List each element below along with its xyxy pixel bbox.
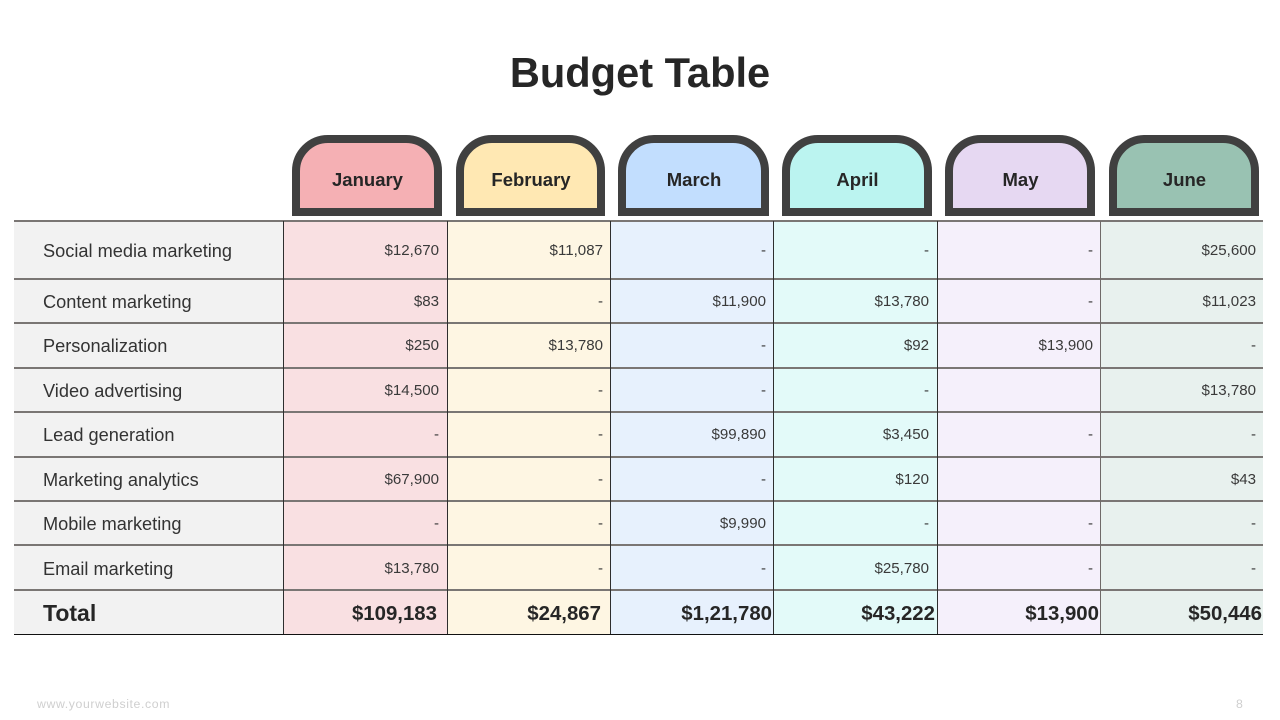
row: Total bbox=[43, 600, 1262, 626]
header tab: January bbox=[292, 135, 442, 216]
footer: page number: 8 bbox=[1236, 697, 1243, 711]
header tab: March bbox=[618, 135, 769, 216]
row: Content marketing: $13,780 bbox=[874, 293, 929, 310]
row: Video advertising: - bbox=[761, 382, 766, 399]
panel: row label column background bbox=[14, 221, 284, 634]
row: Content marketing bbox=[43, 292, 1256, 312]
header tab: February: February bbox=[491, 169, 571, 190]
row: Total: $24,867 bbox=[527, 603, 601, 625]
row: Email marketing bbox=[43, 559, 1256, 579]
row: Lead generation: Lead generation bbox=[43, 425, 174, 445]
row: Email marketing: - bbox=[1088, 560, 1093, 577]
row: Video advertising: Video advertising bbox=[43, 381, 182, 401]
row: Lead generation: - bbox=[598, 426, 603, 443]
row: Marketing analytics: $67,900 bbox=[384, 471, 439, 488]
row: Social media marketing: - bbox=[1088, 242, 1093, 259]
panel: February column background bbox=[447, 221, 610, 634]
header tab: May bbox=[945, 135, 1095, 216]
panel: May column background bbox=[937, 221, 1100, 634]
row: Video advertising bbox=[43, 381, 1256, 401]
row: Email marketing: Email marketing bbox=[43, 559, 173, 579]
row: Lead generation: - bbox=[1088, 426, 1093, 443]
row: Total: $1,21,780 bbox=[681, 603, 772, 625]
header tab: April bbox=[782, 135, 932, 216]
row: Content marketing: - bbox=[1088, 293, 1093, 310]
row: Video advertising: $14,500 bbox=[384, 382, 439, 399]
header tab: March: March bbox=[667, 169, 721, 190]
row: Content marketing: $11,023 bbox=[1203, 293, 1256, 310]
row: Content marketing: Content marketing bbox=[43, 292, 192, 312]
row: Social media marketing: $11,087 bbox=[550, 242, 603, 259]
row: Social media marketing: $25,600 bbox=[1201, 242, 1256, 259]
header tab: January: January bbox=[332, 169, 403, 190]
header tab: April: April bbox=[836, 169, 879, 190]
row: Personalization: $92 bbox=[904, 337, 929, 354]
panel: March column background bbox=[610, 221, 774, 634]
row: Marketing analytics: $43 bbox=[1231, 471, 1256, 488]
row: Total: Total bbox=[43, 600, 96, 626]
header tab: May: May bbox=[1002, 169, 1038, 190]
row: Mobile marketing bbox=[43, 514, 1256, 534]
row: Video advertising: - bbox=[924, 382, 929, 399]
row: Personalization: Personalization bbox=[43, 336, 167, 356]
title: Budget Table bbox=[510, 49, 770, 96]
row: Marketing analytics: - bbox=[598, 471, 603, 488]
row: Mobile marketing: - bbox=[1251, 515, 1256, 532]
row: Personalization: - bbox=[1251, 337, 1256, 354]
row: Email marketing: $13,780 bbox=[384, 560, 439, 577]
panel: April column background bbox=[774, 221, 937, 634]
row: Marketing analytics bbox=[43, 470, 1256, 490]
row: Personalization: $13,900 bbox=[1038, 337, 1093, 354]
row: Personalization: $13,780 bbox=[548, 337, 603, 354]
row: Mobile marketing: Mobile marketing bbox=[43, 514, 181, 534]
row: Marketing analytics: Marketing analytics bbox=[43, 470, 199, 490]
row: Marketing analytics: $120 bbox=[895, 471, 929, 488]
row: Social media marketing: - bbox=[761, 242, 766, 259]
row: Social media marketing bbox=[43, 241, 1256, 261]
row: Email marketing: $25,780 bbox=[874, 560, 929, 577]
row: Email marketing: - bbox=[761, 560, 766, 577]
header tab: June: June bbox=[1163, 169, 1206, 190]
row: Video advertising: - bbox=[598, 382, 603, 399]
row: Video advertising: $13,780 bbox=[1201, 382, 1256, 399]
row: Content marketing: - bbox=[598, 293, 603, 310]
row: Lead generation bbox=[43, 425, 1256, 445]
row: Personalization: $250 bbox=[405, 337, 439, 354]
panel: June column background bbox=[1100, 221, 1263, 634]
row: Total: $109,183 bbox=[352, 603, 437, 625]
row: Content marketing: $83 bbox=[414, 293, 439, 310]
header tab: June bbox=[1109, 135, 1259, 216]
row: Social media marketing: - bbox=[924, 242, 929, 259]
row: Email marketing: - bbox=[598, 560, 603, 577]
panel: January column background bbox=[284, 221, 447, 634]
row: Total: $13,900 bbox=[1025, 603, 1099, 625]
row: Content marketing: $11,900 bbox=[713, 293, 766, 310]
row: Marketing analytics: - bbox=[761, 471, 766, 488]
row: Mobile marketing: - bbox=[434, 515, 439, 532]
row: Mobile marketing: - bbox=[598, 515, 603, 532]
row: Social media marketing: $12,670 bbox=[384, 242, 439, 259]
row: Email marketing: - bbox=[1251, 560, 1256, 577]
row: Personalization bbox=[43, 336, 1256, 356]
header tab: February bbox=[456, 135, 605, 216]
row: Mobile marketing: - bbox=[1088, 515, 1093, 532]
row: Lead generation: - bbox=[1251, 426, 1256, 443]
row: Lead generation: - bbox=[434, 426, 439, 443]
row: Total: $50,446 bbox=[1188, 603, 1262, 625]
row: Total: $43,222 bbox=[861, 603, 935, 625]
row: Social media marketing: Social media marketing bbox=[43, 241, 232, 261]
row: Lead generation: $99,890 bbox=[711, 426, 766, 443]
footer: website: www.yourwebsite.com bbox=[37, 697, 170, 711]
row: Mobile marketing: - bbox=[924, 515, 929, 532]
row: Personalization: - bbox=[761, 337, 766, 354]
row: Lead generation: $3,450 bbox=[883, 426, 929, 443]
row: Mobile marketing: $9,990 bbox=[720, 515, 766, 532]
